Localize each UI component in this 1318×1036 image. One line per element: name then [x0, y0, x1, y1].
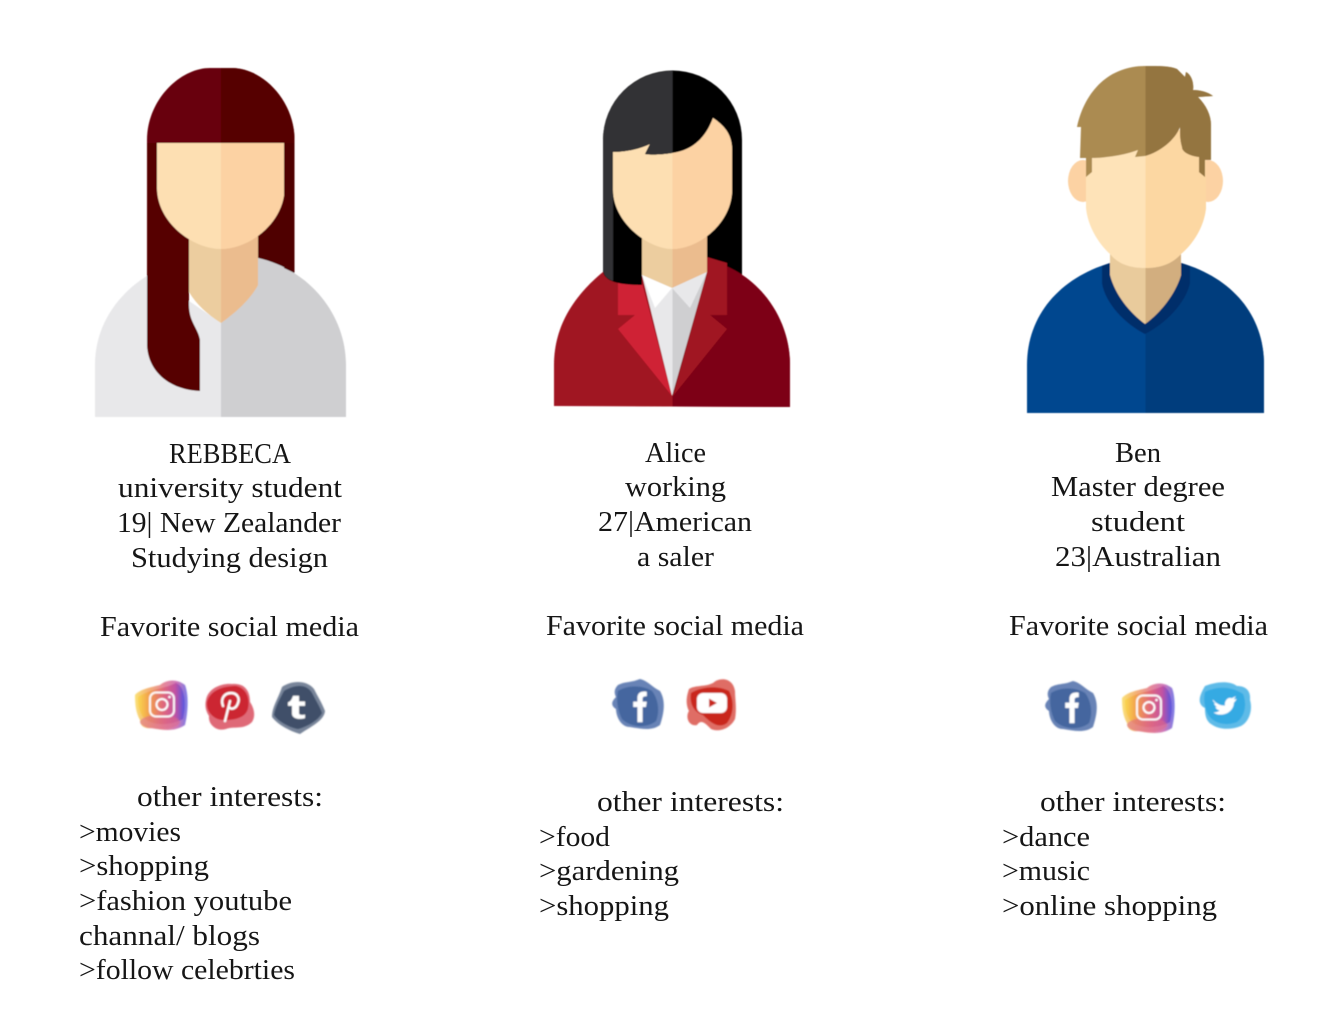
other interests list: >food	[539, 822, 610, 853]
name and bio: university student	[118, 473, 342, 504]
panel: Rebbeca persona	[79, 68, 360, 986]
heading: favorite social media: Favorite social media	[100, 612, 360, 643]
avatar: Rebbeca with long red hair	[95, 68, 346, 417]
heading: favorite social media: Favorite social media	[1009, 611, 1269, 642]
icon: facebook	[612, 679, 664, 729]
other interests list: channal/ blogs	[79, 921, 260, 952]
name and bio: Alice	[645, 438, 706, 469]
other interests list: >follow celebrties	[79, 955, 295, 986]
other interests list: >dance	[1002, 822, 1090, 853]
other interests list: >movies	[79, 817, 181, 848]
other interests list	[1002, 787, 1226, 922]
other interests list: >online shopping	[1002, 891, 1217, 922]
other interests list	[79, 782, 323, 986]
icon: instagram	[135, 680, 188, 730]
avatar: Alice in red blazer	[554, 71, 790, 407]
avatar: Ben in blue sweater	[1027, 66, 1264, 413]
name and bio	[117, 439, 342, 574]
icon: tumblr	[272, 682, 325, 734]
other interests list: >music	[1002, 856, 1090, 887]
icon: youtube	[687, 679, 736, 730]
other interests list: >shopping	[539, 891, 669, 922]
name and bio	[1051, 438, 1225, 573]
icon: facebook	[1045, 681, 1097, 731]
name and bio: student	[1091, 507, 1185, 538]
heading: favorite social media: Favorite social media	[546, 611, 805, 642]
other interests list	[539, 787, 784, 922]
name and bio: 23|Australian	[1055, 542, 1221, 573]
name and bio: Ben	[1115, 438, 1161, 469]
name and bio: REBBECA	[169, 439, 292, 470]
other interests list: other interests:	[1040, 787, 1226, 818]
name and bio: 27|American	[598, 507, 752, 538]
name and bio: working	[625, 472, 726, 503]
icon: instagram	[1122, 683, 1175, 733]
other interests list: other interests:	[137, 782, 323, 813]
name and bio: Studying design	[131, 543, 328, 574]
other interests list: other interests:	[597, 787, 784, 818]
name and bio	[598, 438, 752, 573]
other interests list: >gardening	[539, 856, 679, 887]
panel: Alice persona	[539, 71, 805, 922]
other interests list: >fashion youtube	[79, 886, 292, 917]
other interests list: >shopping	[79, 851, 209, 882]
icon: twitter	[1200, 682, 1251, 729]
name and bio: Master degree	[1051, 472, 1225, 503]
name and bio: 19| New Zealander	[117, 508, 342, 539]
icon: pinterest	[205, 684, 254, 730]
panel: Ben persona	[1002, 66, 1269, 922]
name and bio: a saler	[637, 542, 715, 573]
